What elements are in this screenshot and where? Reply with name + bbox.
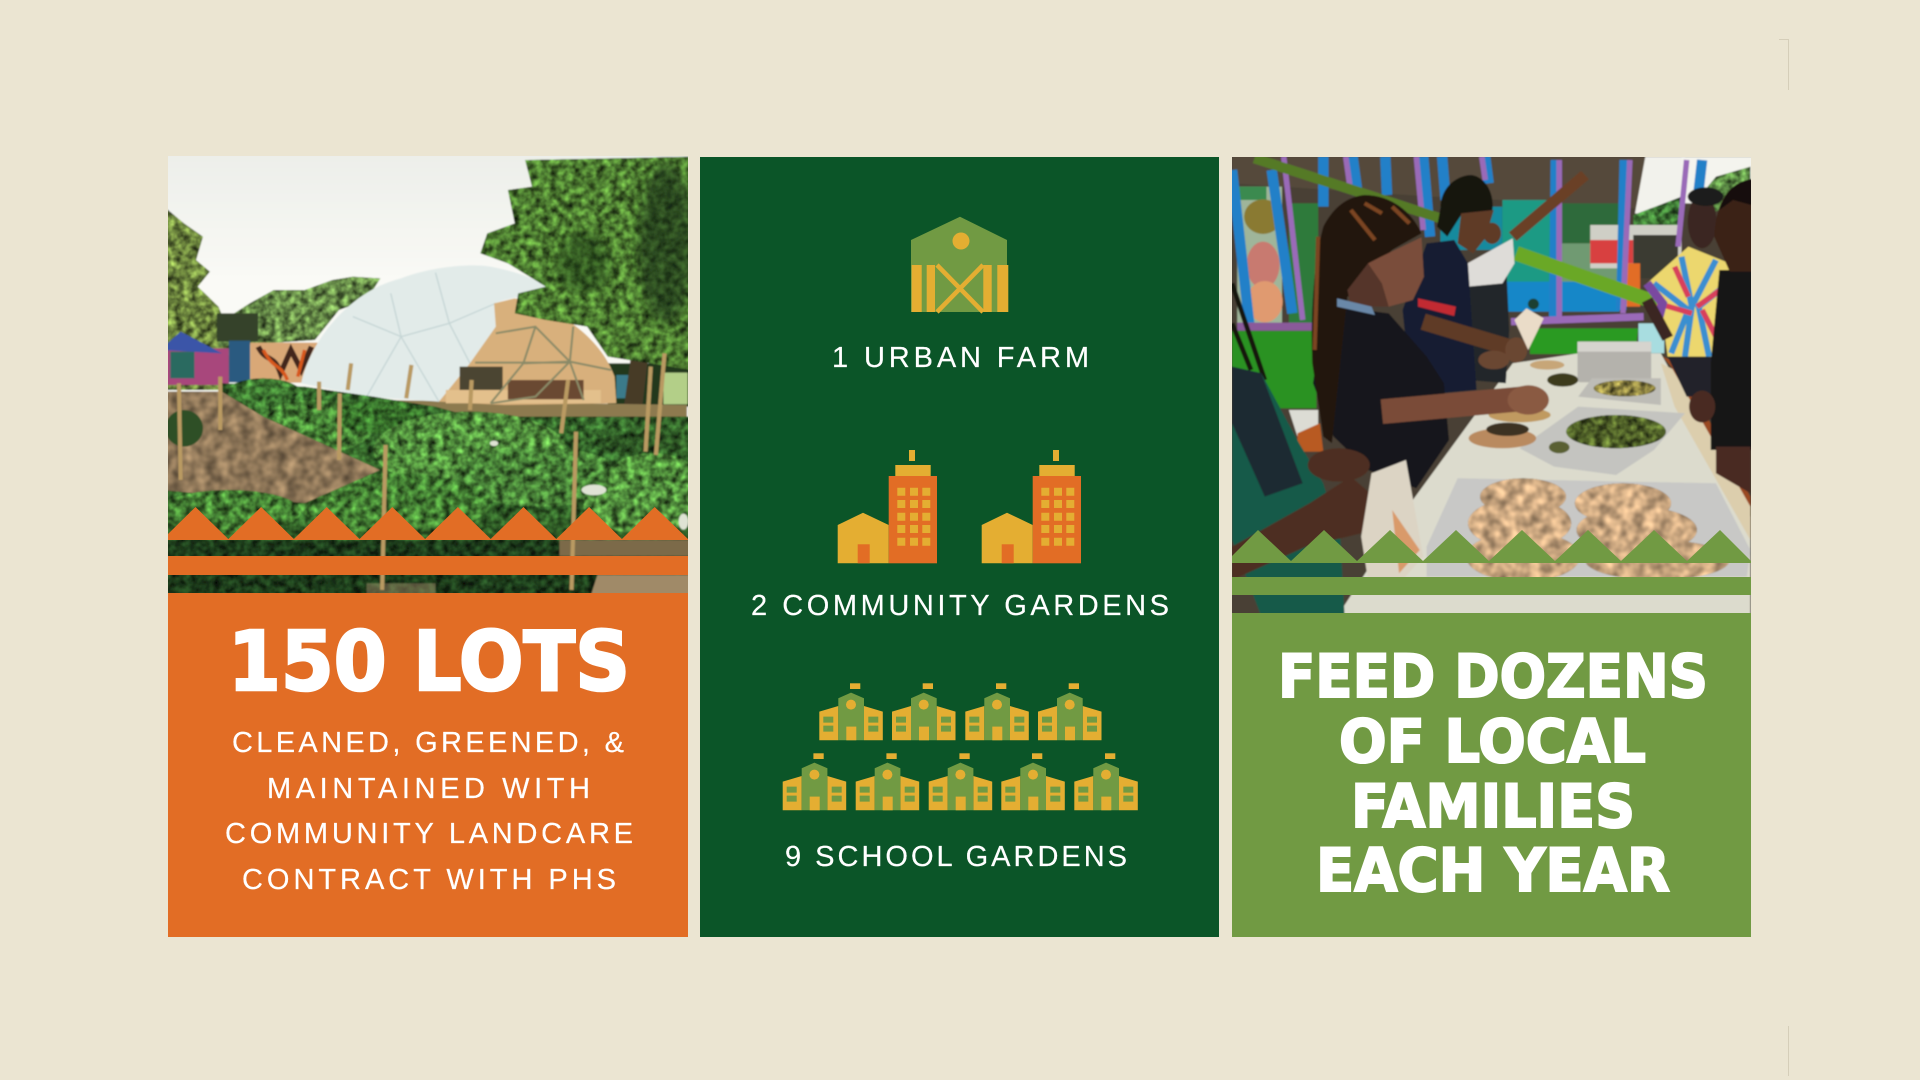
- description text: COMMUNITY LANDCARE: [225, 818, 633, 850]
- icon: community garden buildings: [838, 450, 1081, 563]
- icon: barn: [911, 217, 1008, 312]
- description text: [225, 727, 633, 896]
- zigzag border: [168, 507, 688, 575]
- heading: feed dozens of local families each year: FEED DOZENS: [1278, 642, 1708, 712]
- crop mark bottom: [1788, 1026, 1790, 1076]
- heading: feed dozens of local families each year: OF LOCAL: [1339, 707, 1646, 777]
- panel: feed families: [1220, 150, 1771, 937]
- label: 1 urban farm: 1 URBAN FARM: [832, 342, 1089, 374]
- orange text block: [168, 593, 688, 937]
- zigzag border: [1232, 530, 1751, 595]
- label: 9 school gardens: 9 SCHOOL GARDENS: [785, 841, 1127, 873]
- panel: 150 lots: [157, 150, 711, 937]
- photo: youth preparing food at a table: [1220, 150, 1771, 617]
- panel: farms and gardens: [700, 157, 1219, 937]
- heading: feed dozens of local families each year: FAMILIES: [1351, 772, 1635, 842]
- description text: CLEANED, GREENED, &: [232, 727, 624, 759]
- photo: geodesic dome and urban farm: [157, 150, 711, 597]
- heading: feed dozens of local families each year: EACH YEAR: [1316, 836, 1670, 906]
- label: 2 community gardens: 2 COMMUNITY GARDENS: [751, 590, 1169, 622]
- heading: 150 lots: 150 LOTS: [228, 615, 630, 710]
- crop mark top: [1779, 40, 1788, 90]
- description text: MAINTAINED WITH: [267, 773, 590, 805]
- heading: feed dozens of local families each year: [1278, 642, 1708, 906]
- green text block: [1232, 613, 1751, 937]
- green panel background: [700, 157, 1219, 937]
- icon: school gardens: [783, 683, 1138, 810]
- description text: CONTRACT WITH PHS: [242, 864, 616, 896]
